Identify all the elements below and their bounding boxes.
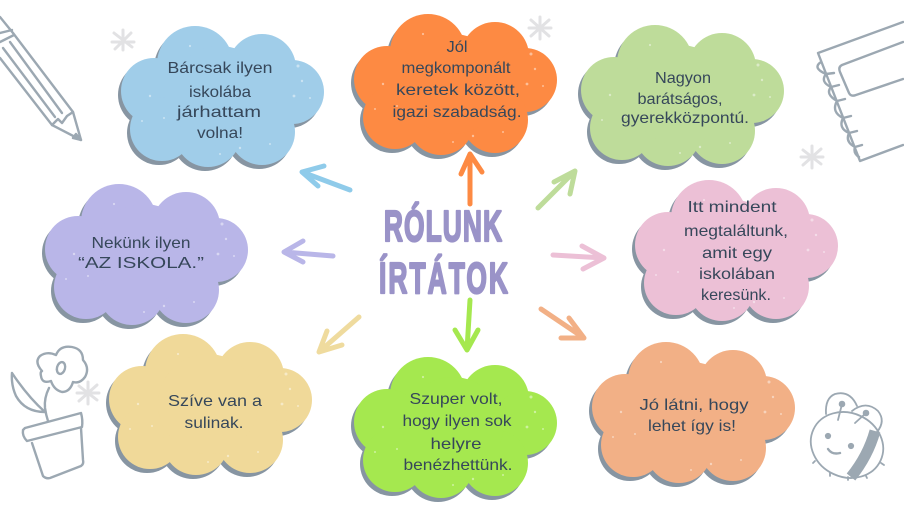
cloud: lime	[351, 357, 557, 502]
cloud text: pink	[684, 199, 788, 304]
cloud text: peach	[640, 397, 748, 435]
cloud text: purple: Nekünk ilyen	[92, 235, 190, 252]
cloud: green	[578, 25, 784, 170]
cloud text: purple: “AZ ISKOLA.”	[78, 255, 204, 272]
arrow: to pink	[553, 246, 604, 269]
cloud text: blue: járhattam	[176, 104, 261, 121]
cloud: pink	[632, 180, 838, 325]
cloud text: orange	[392, 39, 522, 121]
cloud text: green: barátságos,	[638, 91, 722, 108]
icon: bee	[800, 393, 894, 490]
icon: flower pot	[12, 347, 87, 478]
cloud text: lime	[402, 391, 513, 474]
cloud text: yellow: sulinak.	[184, 415, 244, 432]
cloud: peach	[589, 342, 795, 487]
cloud text: yellow	[168, 393, 262, 432]
cloud text: blue: iskolába	[189, 84, 251, 101]
arrow: to purple	[284, 241, 333, 262]
cloud: blue	[118, 26, 324, 171]
decorative star: right	[801, 146, 823, 168]
cloud text: lime: helyre	[430, 436, 482, 453]
cloud text: green	[621, 70, 749, 127]
icon: pencil	[0, 17, 81, 140]
icon: notebook	[817, 22, 903, 161]
cloud text: blue: Bárcsak ilyen	[168, 60, 272, 77]
cloud text: peach: lehet így is!	[648, 418, 736, 435]
title: RÓLUNK	[384, 200, 502, 251]
cloud text: pink: megtaláltunk,	[684, 223, 788, 240]
cloud text: orange: Jól	[446, 39, 468, 56]
title	[379, 200, 508, 303]
cloud text: green: Nagyon	[655, 70, 711, 87]
cloud: yellow	[106, 334, 312, 479]
cloud text: orange: keretek között,	[396, 82, 520, 99]
cloud text: yellow: Szíve van a	[168, 393, 262, 410]
cloud text: pink: keresünk.	[701, 287, 771, 304]
title: ÍRTÁTOK	[379, 253, 508, 303]
arrow: to yellow	[319, 317, 359, 352]
cloud text: blue	[168, 60, 272, 142]
arrow: to peach	[541, 309, 584, 338]
cloud text: lime: Szuper volt,	[410, 391, 502, 408]
cloud text: lime: hogy ilyen sok	[402, 413, 513, 430]
arrow: to orange	[461, 154, 482, 204]
cloud: orange	[351, 14, 557, 159]
cloud text: purple	[78, 235, 204, 272]
cloud text: orange: igazi szabadság.	[392, 104, 522, 121]
cloud text: lime: benézhettünk.	[404, 457, 512, 474]
decorative star: bottom left	[77, 382, 99, 404]
cloud text: peach: Jó látni, hogy	[640, 397, 748, 414]
cloud text: green: gyerekközpontú.	[621, 110, 749, 127]
cloud text: pink: iskolában	[699, 266, 775, 283]
cloud: purple	[42, 184, 248, 329]
arrow: to blue	[302, 166, 350, 190]
decorative star: top centre	[529, 17, 551, 39]
cloud text: pink: amit egy	[702, 245, 772, 262]
cloud text: pink: Itt mindent	[688, 199, 777, 216]
decorative star: top left	[112, 30, 134, 50]
arrow: to lime	[455, 300, 478, 350]
cloud text: blue: volna!	[197, 125, 243, 142]
arrow: to green	[538, 171, 575, 208]
cloud text: orange: megkomponált	[402, 60, 511, 77]
